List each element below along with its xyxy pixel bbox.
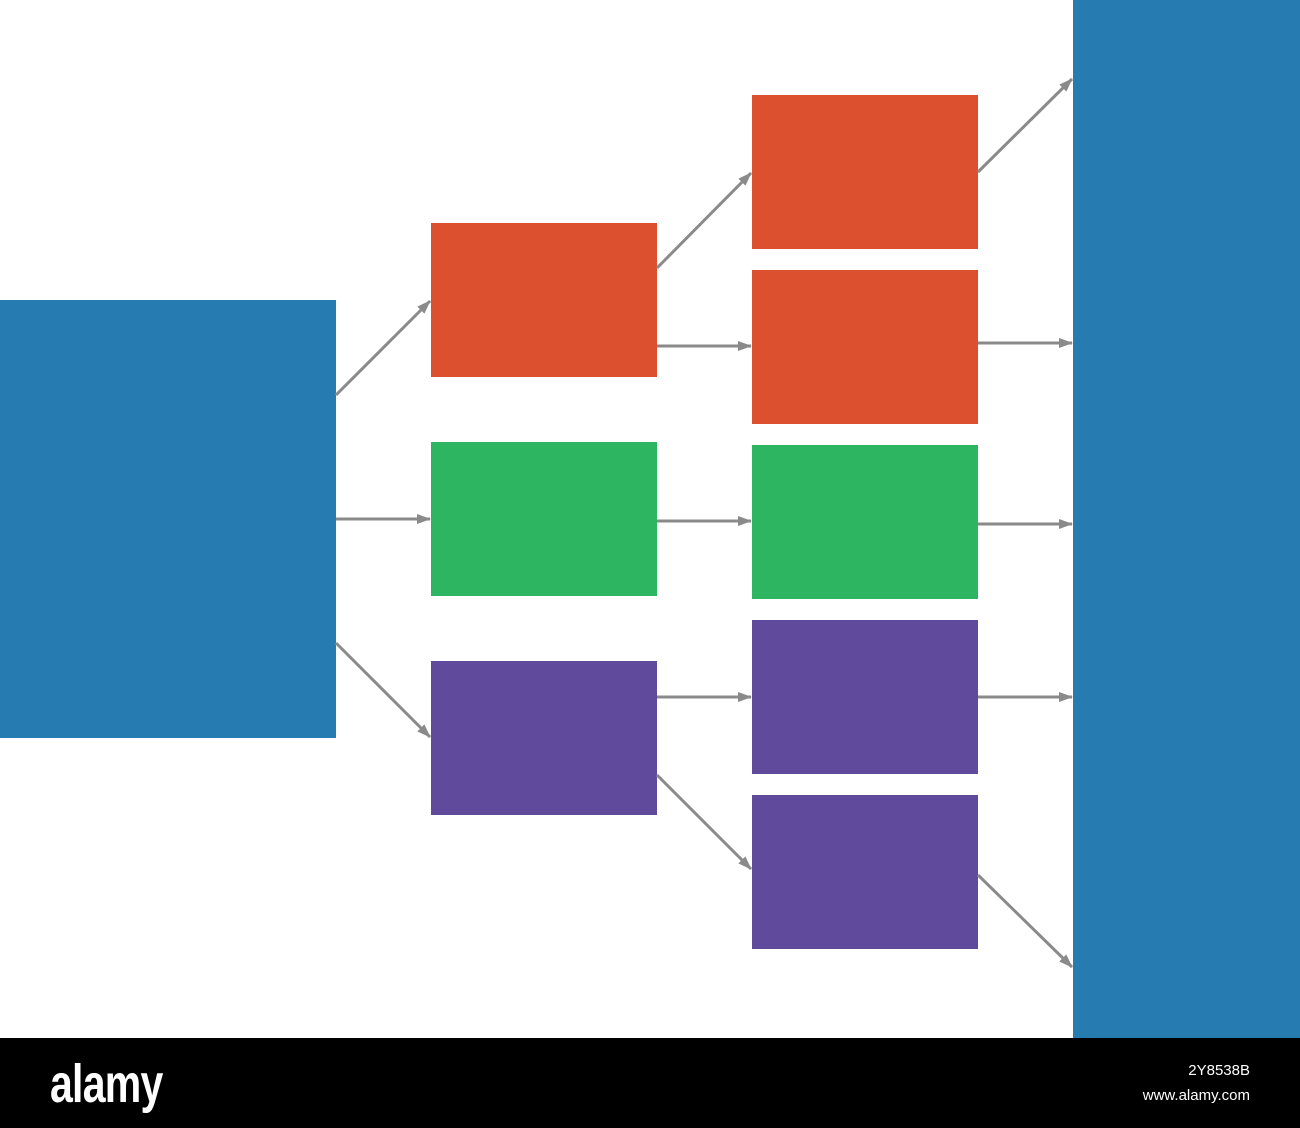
footer bar: alamy [50, 1055, 164, 1114]
footer bar: 2Y8538B [1188, 1062, 1250, 1079]
arrows [336, 79, 1072, 967]
footer bar: www.alamy.com [1142, 1087, 1250, 1104]
column 1 boxes [431, 223, 657, 815]
panel: left source block [0, 300, 336, 738]
column 2 boxes [752, 95, 978, 949]
footer bar [0, 1038, 1300, 1128]
panel: right target block [1073, 0, 1300, 1038]
